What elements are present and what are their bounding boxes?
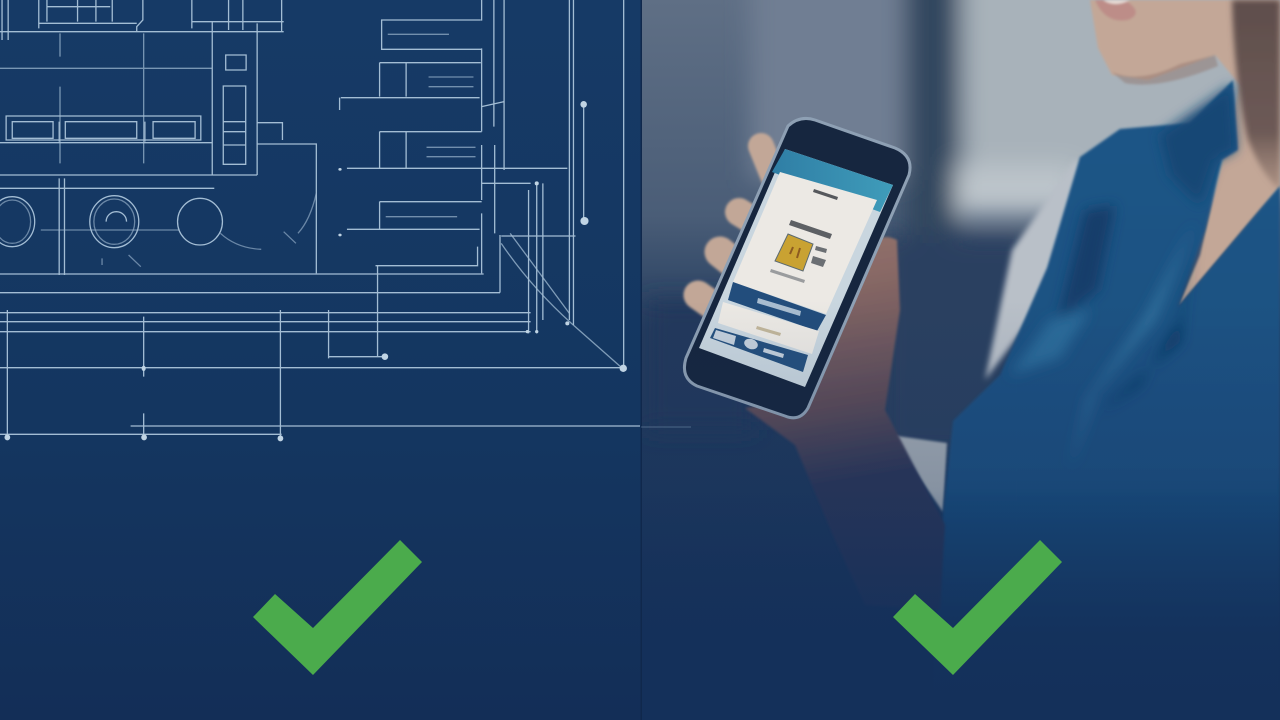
white content card: [733, 172, 877, 314]
card subheading: [789, 220, 832, 239]
blueprint floor plan drawing: [0, 0, 640, 441]
bottom bar items: [713, 330, 784, 358]
background light patch: [890, 435, 947, 512]
bottom navy fade: [683, 336, 1280, 720]
panel: blueprint: [0, 0, 641, 720]
light undershirt: [982, 164, 1076, 380]
phone body: [684, 118, 910, 418]
action bar label: [757, 298, 801, 316]
neck and chin: [1090, 0, 1280, 307]
bottom navy bar: [710, 328, 808, 372]
blue blouse: [942, 78, 1280, 592]
navy action bar: [728, 282, 826, 331]
screen header band: [772, 149, 893, 212]
center divider line: [640, 0, 642, 720]
fingers: [698, 146, 778, 312]
white lower strip: [718, 302, 819, 354]
lower strip label: [756, 326, 781, 336]
icon: green check mark: [253, 540, 422, 675]
gold app icon: [775, 234, 827, 271]
blouse folds and collar shading: [1016, 80, 1245, 412]
card caption: [770, 269, 805, 283]
panel: person holding phone: [642, 0, 1280, 720]
phone screen: [699, 149, 893, 387]
arm and hand: [698, 146, 945, 610]
smartphone: [684, 118, 910, 418]
icon: green check mark: [893, 540, 1062, 675]
blurred office background: [645, 0, 1280, 455]
horizontal blueprint line extension: [641, 426, 691, 428]
card heading: [813, 189, 838, 200]
hair: [1232, 0, 1280, 190]
